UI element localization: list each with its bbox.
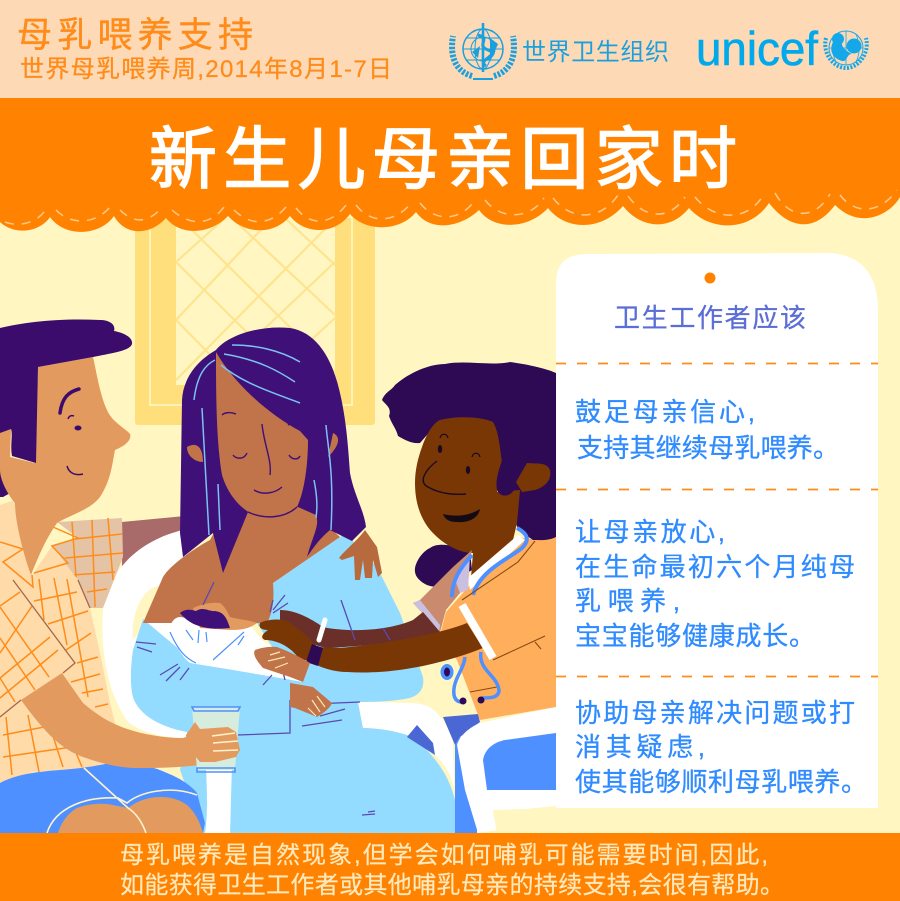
nurse's facial features	[423, 434, 480, 522]
nurse's hair chunk	[496, 460, 527, 496]
card text block 2: 乳喂养,	[575, 586, 680, 616]
card text block 3: 使其能够顺利母乳喂养。	[575, 767, 867, 797]
icon: unicef logo	[825, 31, 867, 68]
unicef wordmark: unicef	[696, 22, 819, 75]
baby's hair	[180, 609, 230, 629]
footer text: 母乳喂养是自然现象,但学会如何哺乳可能需要时间,因此,	[120, 842, 768, 869]
man's head	[0, 319, 132, 575]
nurse's stray hair tuft	[415, 545, 472, 587]
card text block 3	[575, 698, 867, 797]
nurse's face and neck	[415, 417, 520, 590]
white blanket with baby	[170, 603, 303, 682]
orange curtain banner	[0, 98, 900, 232]
mother's neck and head	[180, 327, 366, 573]
man's face	[0, 357, 130, 575]
mother's facial features	[222, 413, 300, 517]
mother's lower hand	[290, 683, 332, 717]
stethoscope neck tube	[452, 528, 527, 597]
subheading: world breastfeeding week: 世界母乳喂养周,2014年8月1-7日	[20, 56, 392, 83]
chair back behind the man	[122, 516, 185, 575]
man's back hair	[0, 468, 16, 497]
pin	[704, 272, 716, 284]
blanket folds	[170, 630, 244, 663]
nurse's ear	[516, 463, 550, 492]
man's shorts	[0, 763, 205, 833]
card text block 1	[575, 397, 839, 463]
mother's hair strands	[194, 345, 332, 535]
footer text	[120, 842, 784, 899]
nurse's lavender cuff and wrist	[413, 550, 472, 632]
baby's head	[193, 603, 257, 630]
nurse's head	[382, 362, 556, 590]
mother's torso	[143, 500, 340, 623]
nurse's hair	[382, 362, 556, 540]
glass	[192, 707, 240, 772]
curtain stitches	[5, 190, 897, 224]
panel: white chair of the mother	[102, 530, 240, 745]
chair leg	[205, 768, 232, 833]
title: 新生儿母亲回家时	[149, 122, 737, 198]
panel: white chair of the nurse	[358, 702, 556, 833]
chair cushion	[133, 586, 170, 640]
footer band	[0, 833, 900, 901]
cream patch under the chair arm	[358, 706, 407, 740]
black wrist watch	[306, 644, 323, 666]
nurse's collar	[468, 535, 525, 590]
mother's face	[216, 352, 308, 517]
panel: mother's light blue dress	[131, 535, 455, 833]
man's facial features	[60, 389, 83, 475]
man's hand on glass	[186, 722, 240, 762]
white wrist band	[319, 620, 325, 640]
man's hair	[0, 319, 132, 463]
heading: breastfeeding support: 母乳喂养支持	[17, 16, 253, 55]
dashed divider lines	[556, 364, 878, 676]
card text block 2: 宝宝能够健康成长。	[575, 621, 815, 651]
window	[135, 218, 375, 425]
nurse's top sleeve strip and seams	[462, 541, 545, 692]
stethoscope lower tubes	[440, 652, 499, 704]
card text block 2: 在生命最初六个月纯母	[575, 552, 855, 582]
mother's hand	[254, 647, 310, 682]
mother's ears	[187, 433, 338, 462]
footer text: 如能获得卫生工作者或其他哺乳母亲的持续支持,会很有帮助。	[120, 872, 784, 899]
nurse's hand on mother's shoulder	[339, 530, 382, 580]
WHO name: 世界卫生组织	[522, 39, 669, 66]
panel: man's plaid shirt back	[52, 518, 123, 608]
mother's fold lines	[136, 582, 390, 815]
card text block 3: 协助母亲解决问题或打	[575, 698, 855, 728]
panel: health worker card	[556, 253, 878, 808]
card text block 1: 鼓足母亲信心,	[575, 397, 755, 427]
card text block 2	[575, 517, 855, 651]
card text block 1: 支持其继续母乳喂养。	[577, 433, 839, 463]
panel: nurse's orange top	[440, 537, 556, 720]
maroon arm of the nurse	[280, 610, 440, 648]
mother's hair back	[180, 327, 366, 573]
card text block 3: 消其疑虑,	[575, 732, 705, 762]
card heading: 卫生工作者应该	[614, 303, 806, 333]
card text block 2: 让母亲放心,	[575, 517, 725, 547]
nurse's dark arm	[259, 620, 483, 673]
panel: man's shirt	[0, 500, 118, 783]
man's arm	[21, 673, 240, 768]
header strip	[0, 0, 900, 100]
icon: WHO logo	[452, 23, 514, 79]
